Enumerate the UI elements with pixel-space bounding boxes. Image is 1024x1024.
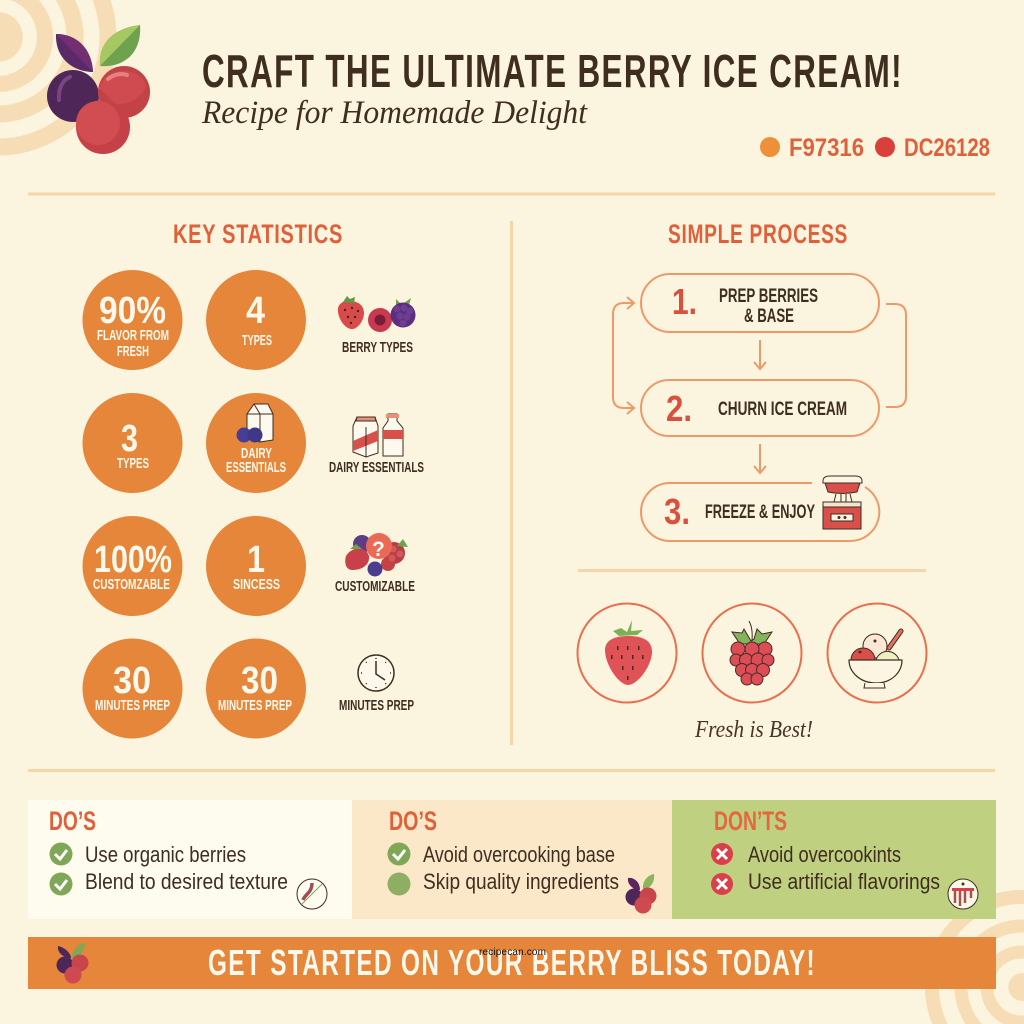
stat: 3 types: TYPES: [117, 456, 149, 472]
icon: customizable berries: [345, 533, 408, 576]
stat: 30 minutes prep second: [206, 638, 306, 738]
label: minutes prep: MINUTES PREP: [339, 698, 414, 714]
stat: 4 types: [206, 270, 306, 370]
icon: dripping cake: [948, 879, 978, 909]
panel: do's one: [28, 800, 352, 919]
process step 1: & BASE: [744, 306, 794, 327]
process step 3: [641, 483, 879, 541]
icon: ice cream bowl: [828, 604, 926, 702]
label: berry types: BERRY TYPES: [342, 340, 413, 356]
colour legend: [760, 134, 990, 162]
process step 3: FREEZE & ENJOY: [705, 502, 815, 523]
panel: do's one: DO’S: [49, 806, 96, 836]
panel: do's two: DO’S: [389, 806, 437, 836]
icon: banner berries: [56, 943, 88, 984]
check item: organic berries: Use organic berries: [85, 842, 246, 867]
icon: dairy carton and bottle: [353, 414, 403, 457]
icon: ice cream machine: [823, 476, 862, 529]
process step 1: 1.: [672, 281, 697, 322]
icon: raspberry: [702, 604, 802, 702]
arrow: right loop: [886, 304, 906, 407]
label: dairy essentials: DAIRY ESSENTIALS: [329, 460, 424, 476]
stat: 30 minutes prep: 30: [113, 660, 151, 702]
subtitle: Recipe for Homemade Delight: [201, 95, 588, 131]
icon: customizable berries: ?: [372, 538, 385, 561]
stat: 90% flavor from fresh: 90%: [99, 290, 166, 332]
label: customizable: CUSTOMIZABLE: [335, 579, 415, 595]
process step 1: [641, 274, 879, 332]
logo: berry cluster: [47, 25, 150, 154]
stat: 3 types: [82, 393, 182, 493]
stat: 3 types: 3: [121, 418, 138, 460]
icon: crossed out berry: [297, 879, 327, 909]
stat: 90% flavor from fresh: FRESH: [117, 344, 149, 360]
colour legend: F97316: [789, 134, 864, 162]
stat: 30 minutes prep: [82, 638, 182, 738]
stat: 30 minutes prep second: MINUTES PREP: [218, 698, 292, 714]
panel: don'ts: DON’TS: [714, 806, 787, 836]
stat: 100% customizable: CUSTOMZABLE: [93, 577, 170, 593]
process step 2: CHURN ICE CREAM: [718, 399, 847, 420]
stat: 100% customizable: 100%: [94, 539, 172, 581]
panel: key statistics circles: [82, 270, 306, 738]
heading: simple process: SIMPLE PROCESS: [668, 219, 848, 249]
check item: avoid overcooking: Avoid overcooking base: [423, 842, 615, 867]
stat: dairy essentials: ESSENTIALS: [226, 460, 286, 476]
check item: blend: Blend to desired texture: [85, 869, 288, 894]
icon: mini berries: [626, 874, 656, 914]
stat: 30 minutes prep second: 30: [241, 660, 278, 702]
banner: call to action: [28, 937, 996, 989]
arrow: step 2 to 3: [754, 444, 766, 473]
process step 2: [641, 380, 879, 436]
stat: 4 types: TYPES: [242, 333, 272, 349]
stat: dairy essentials: DAIRY: [241, 446, 272, 462]
heading: key statistics: KEY STATISTICS: [173, 219, 343, 249]
process step 1: PREP BERRIES: [719, 286, 818, 307]
arrow: step 1 to 2: [754, 340, 766, 369]
panel: do's two: [352, 800, 672, 919]
stat: 90% flavor from fresh: FLAVOR FROM: [97, 328, 169, 344]
stat: 1 success: [206, 516, 306, 616]
icon: clock: [358, 655, 394, 691]
watermark: recipecan.com: [479, 947, 546, 958]
icon: strawberry: [578, 604, 676, 702]
arrow: left loop: [613, 297, 634, 414]
stat: 1 success: SINCESS: [233, 577, 280, 593]
icon: berry types: [338, 296, 416, 332]
stat: 30 minutes prep: MINUTES PREP: [95, 698, 170, 714]
bullet item: skip quality: Skip quality ingredients: [423, 869, 619, 894]
stat: 100% customizable: [82, 516, 182, 616]
stat: dairy essentials: [206, 393, 306, 493]
process step 3: 3.: [664, 491, 690, 532]
cross item: artificial flavorings: Use artificial flavorings: [748, 869, 940, 894]
cross item: avoid overcookints: [711, 842, 901, 867]
colour legend: DC26128: [904, 134, 990, 162]
stat: 4 types: 4: [246, 290, 265, 332]
stat: 1 success: 1: [247, 539, 265, 581]
panel: don'ts: [672, 800, 996, 919]
stat: 90% flavor from fresh: [82, 270, 182, 370]
decorative rings: top left: [0, 0, 117, 156]
cross item: avoid overcookints: Avoid overcookints: [748, 842, 901, 867]
decorative rings: bottom right: [925, 890, 1024, 1024]
tagline: fresh is best: Fresh is Best!: [694, 717, 813, 743]
process step 2: 2.: [666, 388, 692, 429]
